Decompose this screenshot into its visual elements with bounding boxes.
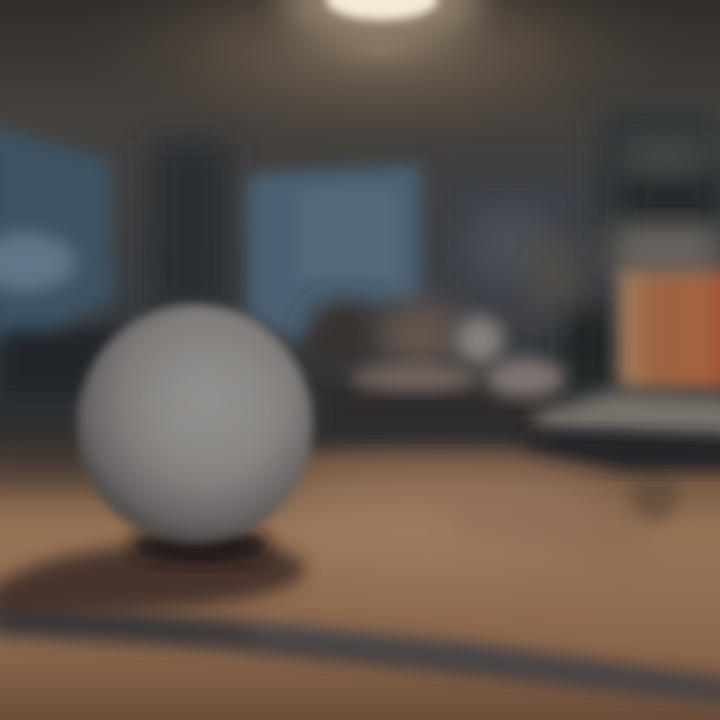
orange drink glass <box>612 225 720 390</box>
left window <box>0 125 130 398</box>
center window <box>248 165 420 345</box>
right shelf <box>475 141 720 385</box>
sphere <box>77 304 313 544</box>
dark band on table <box>0 600 720 705</box>
table surface <box>0 430 720 720</box>
ceiling light <box>282 0 482 42</box>
table objects <box>308 301 565 435</box>
right tray <box>525 392 720 470</box>
ball shadow <box>0 527 305 613</box>
